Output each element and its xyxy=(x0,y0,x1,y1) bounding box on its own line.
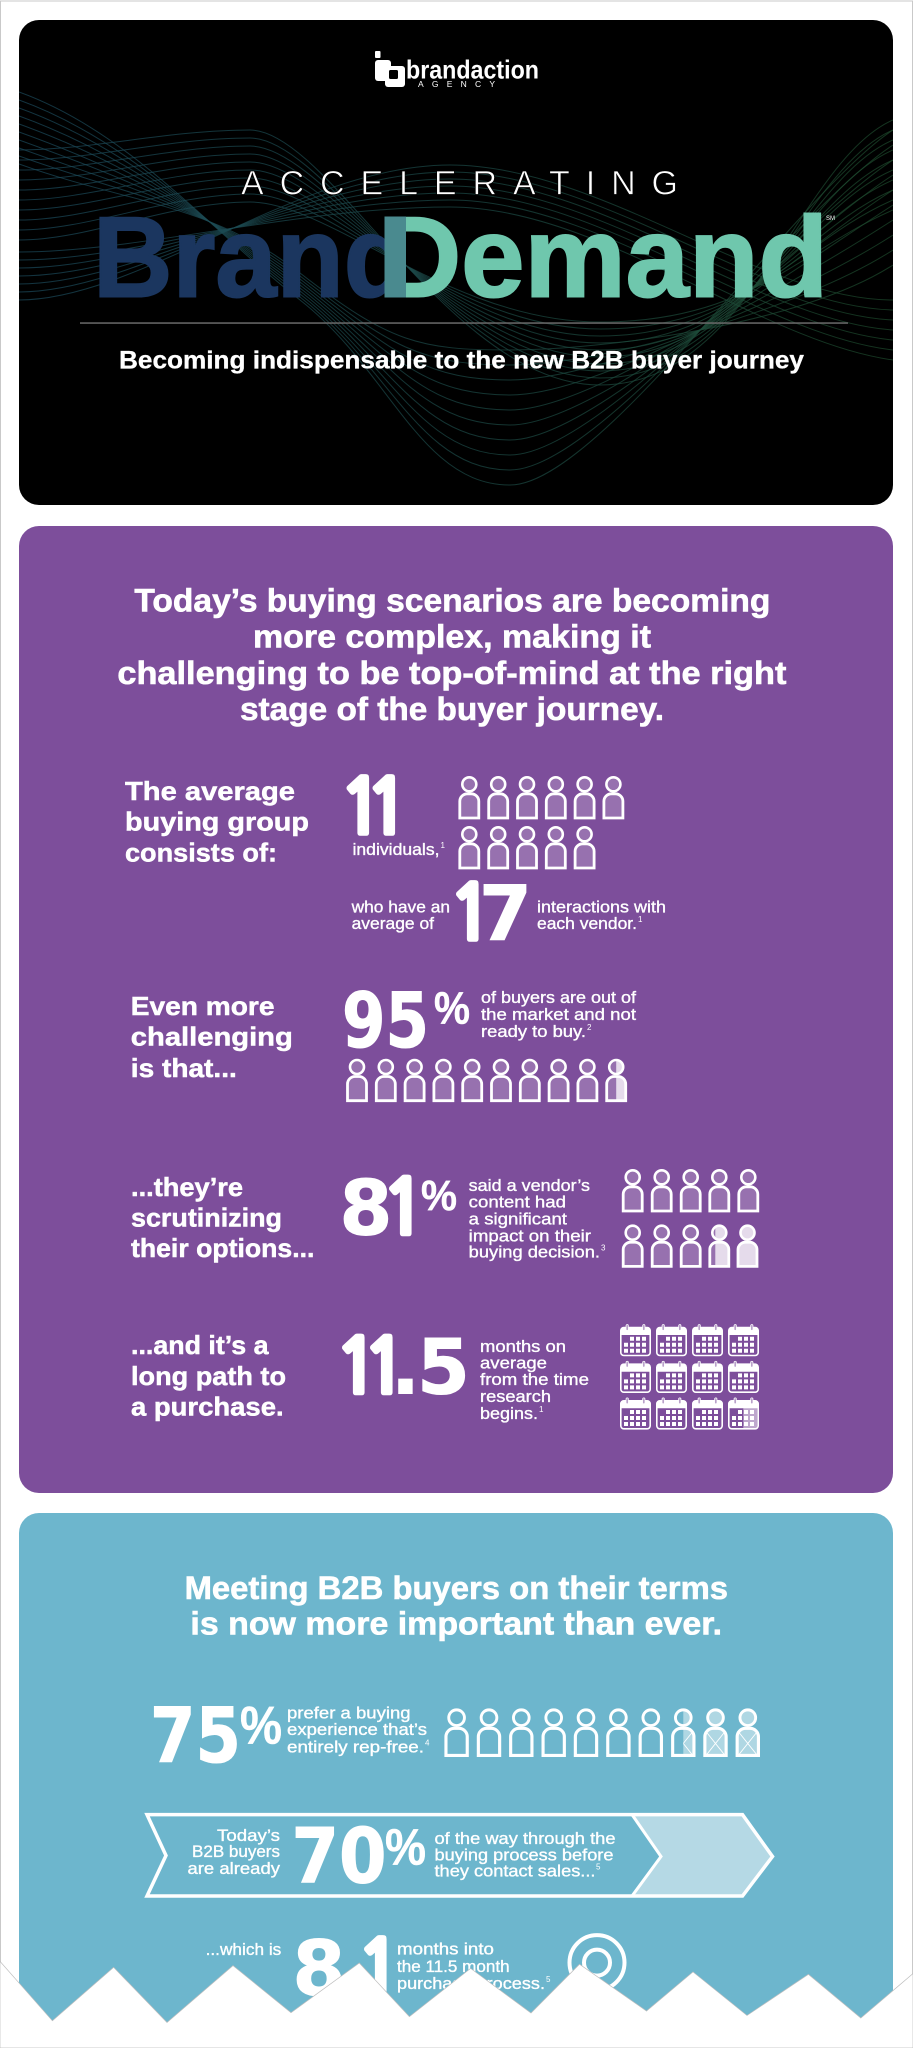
stat: 17 interactions: 1 xyxy=(448,877,494,952)
icon group: 10 people, 95 percent xyxy=(348,1060,626,1101)
arrow: 70 percent progress chevron xyxy=(147,1815,775,1896)
label: scrutinizing options: scrutinizing xyxy=(131,1203,282,1233)
label: scrutinizing options: ...they’re xyxy=(131,1172,243,1202)
stat: 70 percent: 70 xyxy=(292,1812,386,1900)
stat: 70 percent: 5 xyxy=(596,1862,601,1872)
stat: 8.1 months: months into xyxy=(397,1939,494,1958)
stat: 8.1 months: ...which is xyxy=(206,1940,281,1959)
stat: 17 interactions: 1 xyxy=(638,915,643,924)
icon group: 10 people, 81 percent xyxy=(623,1170,758,1266)
stat: 11.5 months xyxy=(334,1322,589,1423)
icon group: calendars xyxy=(621,1324,758,1429)
heading: meeting buyers: Meeting B2B buyers on their terms xyxy=(185,1570,728,1606)
title: BrandDemand wordmark xyxy=(99,212,834,298)
stat: 81 percent: impact on their xyxy=(469,1227,591,1246)
stat: 70 percent: % xyxy=(385,1818,426,1876)
label: average buying group: consists of: xyxy=(125,838,277,868)
stat: 11.5 months: average xyxy=(480,1354,547,1373)
stat: 8.1 months: purchase process. xyxy=(397,1974,545,1993)
label: scrutinizing options xyxy=(131,1172,314,1263)
stat: 8.1 months xyxy=(206,1924,551,2013)
heading: buying scenarios: Today’s buying scenarios are becoming xyxy=(134,583,770,619)
stat: 17 interactions xyxy=(351,869,666,958)
stat: 8.1 months: the 11.5 month xyxy=(397,1957,510,1976)
stat: 95 percent: 95 xyxy=(342,976,429,1065)
stat: 81 percent: said a vendor’s xyxy=(469,1176,590,1195)
stat: 95 percent: of buyers are out of xyxy=(481,988,636,1007)
title: BrandDemand wordmark: Demand xyxy=(379,194,828,322)
stat: 81 percent xyxy=(340,1164,606,1262)
heading: meeting buyers: is now more important than ever. xyxy=(190,1606,722,1642)
stat: 75 percent: prefer a buying xyxy=(287,1704,411,1722)
label: long path to purchase: a purchase. xyxy=(131,1392,284,1422)
stat: 11.5 months: from the time xyxy=(480,1370,589,1389)
stat: 11 individuals: 11 xyxy=(338,771,411,846)
title: BrandDemand wordmark: Brand xyxy=(93,194,411,322)
label: even more challenging: challenging xyxy=(131,1022,293,1052)
label: even more challenging: Even more xyxy=(131,991,274,1021)
label: even more challenging xyxy=(131,991,293,1083)
logo: brandaction agency: AGENCY xyxy=(418,79,495,89)
stat: 11.5 months: 1 xyxy=(334,1330,380,1406)
stat: 95 percent: % xyxy=(434,982,470,1034)
panel: buying scenarios xyxy=(19,526,893,1493)
stat: 75 percent: % xyxy=(240,1696,282,1756)
stat: 81 percent: % xyxy=(421,1172,457,1220)
stat: 70 percent: Today’s xyxy=(217,1826,280,1845)
panel: meeting buyers xyxy=(19,1513,893,2048)
heading: buying scenarios: stage of the buyer journey. xyxy=(240,691,664,727)
stat: 11.5 months: research xyxy=(480,1387,551,1406)
stat: 17 interactions: who have an xyxy=(351,898,450,917)
title: accelerating: ACCELERATING xyxy=(241,164,678,202)
stat: 70 percent xyxy=(188,1812,616,1900)
stat: 81 percent: buying decision. xyxy=(469,1243,600,1262)
panel: header xyxy=(19,20,893,505)
stat: 75 percent xyxy=(150,1691,430,1780)
stat: 8.1 months: 1 xyxy=(356,1932,402,2007)
stat: 17 interactions: each vendor. xyxy=(537,914,637,933)
stat: 11 individuals: 1 xyxy=(440,841,446,850)
stat: 11.5 months: begins. xyxy=(480,1404,538,1423)
stat: 95 percent: the market and not xyxy=(481,1005,636,1024)
stat: 11 individuals xyxy=(338,771,446,859)
stat: 81 percent: a significant xyxy=(469,1210,567,1229)
stat: 11.5 months: 5 xyxy=(417,1322,470,1412)
stat: 17 interactions: 7 xyxy=(479,869,532,958)
stat: 81 percent: 8 xyxy=(340,1164,392,1252)
icon: target xyxy=(570,1935,624,1990)
icon group: 11 people xyxy=(460,777,623,868)
label: average buying group xyxy=(125,776,309,868)
wave line pattern xyxy=(19,92,893,485)
label: scrutinizing options: their options... xyxy=(131,1233,314,1263)
label: long path to purchase xyxy=(131,1330,286,1422)
stat: 75 percent: experience that’s xyxy=(287,1720,427,1739)
icon group: 10 people, 75 percent xyxy=(446,1710,758,1755)
heading: meeting buyers xyxy=(185,1570,728,1642)
stat: 17 interactions: interactions with xyxy=(537,898,666,917)
logo: brandaction agency xyxy=(375,51,539,89)
divider line xyxy=(80,322,848,324)
stat: 81 percent: content had xyxy=(469,1193,566,1212)
stat: 11.5 months: months on xyxy=(480,1337,566,1356)
stat: 70 percent: B2B buyers xyxy=(192,1842,280,1861)
label: even more challenging: is that... xyxy=(131,1053,237,1083)
torn paper edge xyxy=(0,1961,913,2048)
stat: 95 percent: ready to buy. xyxy=(481,1022,586,1041)
stat: 11.5 months: 1 xyxy=(362,1330,408,1406)
stat: 11.5 months: . xyxy=(391,1322,420,1412)
label: long path to purchase: long path to xyxy=(131,1361,286,1391)
stat: 8.1 months: . xyxy=(338,1924,367,2013)
label: long path to purchase: ...and it’s a xyxy=(131,1330,269,1360)
stat: 70 percent: buying process before xyxy=(434,1846,614,1865)
stat: 70 percent: are already xyxy=(188,1859,281,1878)
stat: 8.1 months: 8 xyxy=(292,1924,345,2013)
stat: 75 percent: 4 xyxy=(425,1738,430,1748)
heading: buying scenarios: challenging to be top-of-mind at the right xyxy=(117,655,787,691)
stat: 70 percent: of the way through the xyxy=(434,1829,616,1848)
heading: buying scenarios xyxy=(117,583,787,727)
stat: 75 percent: 75 xyxy=(150,1691,241,1780)
stat: 8.1 months: 5 xyxy=(546,1975,551,1984)
title: BrandDemand wordmark: SM xyxy=(826,216,835,222)
heading: buying scenarios: more complex, making it xyxy=(253,619,651,655)
stat: 81 percent: 1 xyxy=(381,1172,427,1246)
stat: 70 percent: they contact sales... xyxy=(434,1861,596,1880)
subtitle: Becoming indispensable to the new B2B buyer journey xyxy=(119,346,804,374)
stat: 81 percent: 3 xyxy=(601,1244,606,1252)
stat: 95 percent xyxy=(342,976,636,1065)
label: average buying group: The average xyxy=(125,776,295,806)
stat: 75 percent: entirely rep-free. xyxy=(287,1738,424,1757)
stat: 17 interactions: average of xyxy=(352,914,434,933)
label: average buying group: buying group xyxy=(125,807,309,837)
stat: 95 percent: 2 xyxy=(587,1023,592,1032)
stat: 11 individuals: individuals, xyxy=(352,840,440,859)
stat: 11.5 months: 1 xyxy=(539,1405,544,1414)
logo: brandaction agency: brandaction xyxy=(406,54,539,84)
